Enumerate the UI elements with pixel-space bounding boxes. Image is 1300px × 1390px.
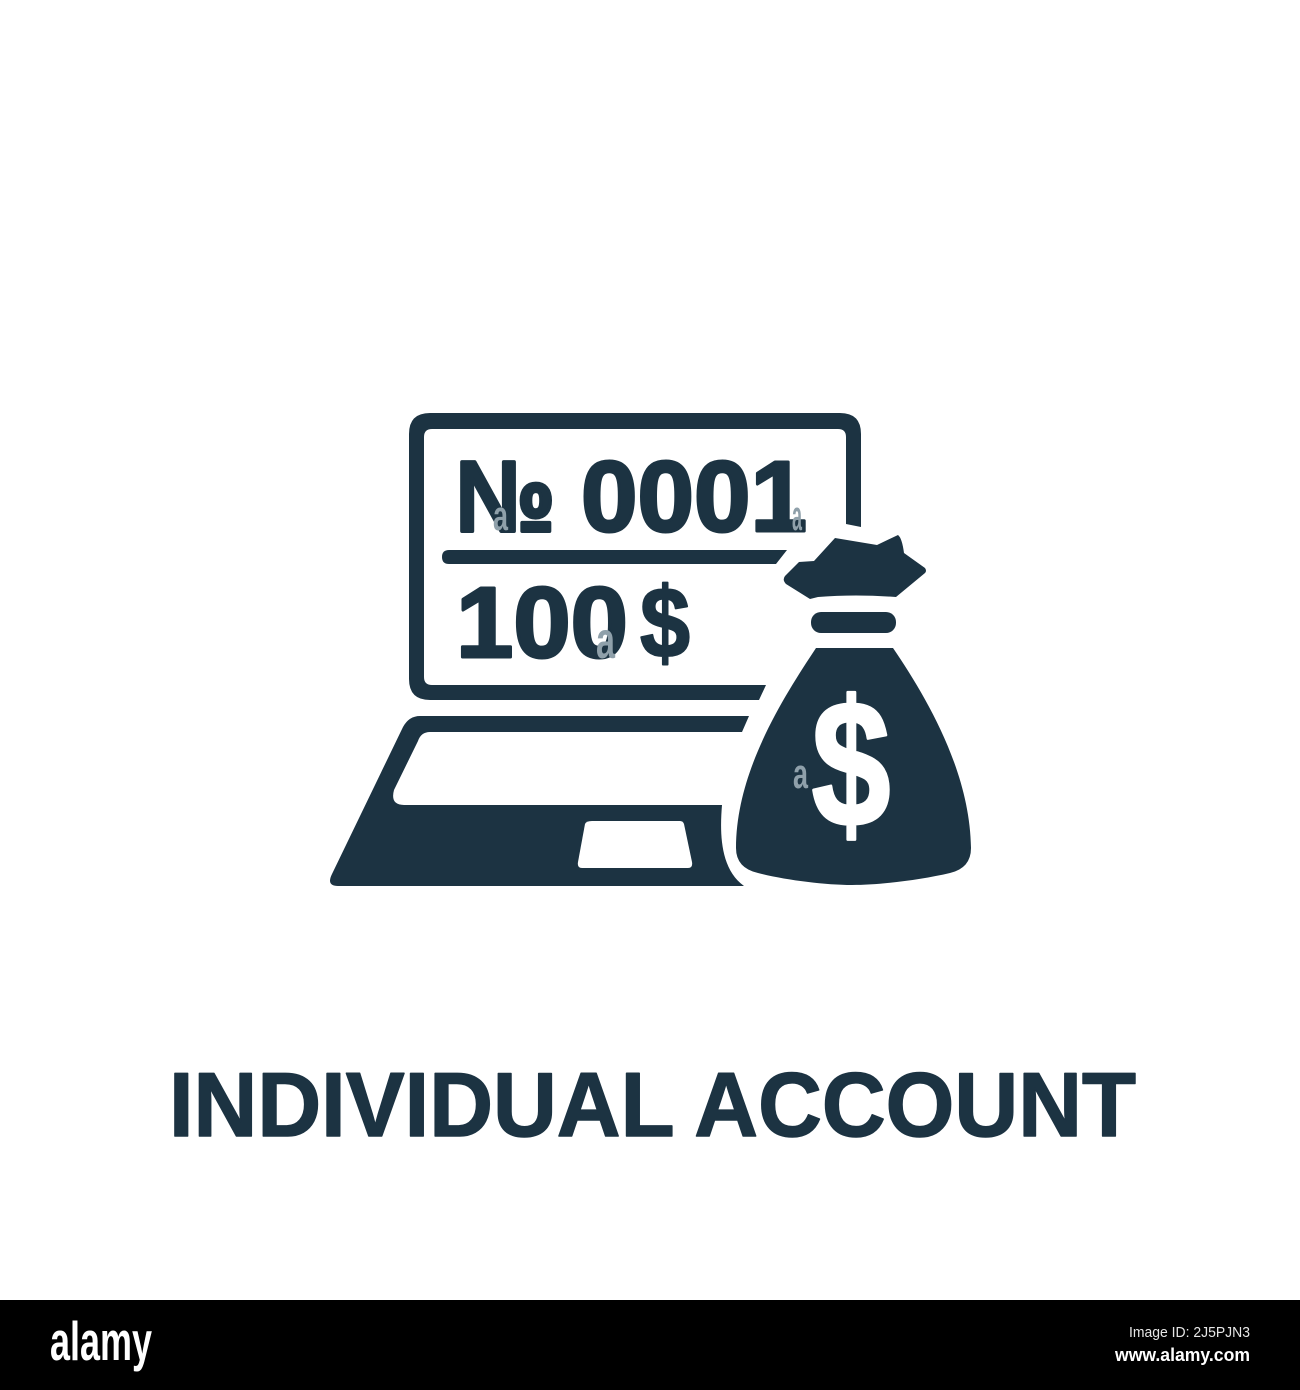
trackpad [578, 821, 692, 868]
stock watermark letters: a [493, 492, 508, 539]
website: www.alamy.com [1114, 1345, 1250, 1365]
amount text: $ [640, 567, 690, 679]
account number text: № [456, 441, 555, 553]
money bag top [784, 535, 926, 599]
money bag body [736, 648, 971, 885]
stock watermark letters: a [793, 750, 808, 797]
image id: Image ID: 2J5PJN3 [1129, 1324, 1250, 1341]
account number text [456, 441, 807, 553]
icon: laptop with account number and money bag [330, 413, 971, 886]
money bag tie [811, 612, 896, 633]
account number text: 0001 [581, 441, 807, 553]
stock watermark letters: a [596, 612, 616, 670]
dollar sign on bag: $ [811, 664, 891, 865]
amount text: 100 [456, 567, 628, 679]
footer bar [0, 1300, 1300, 1390]
laptop base with keyboard cut-out [330, 716, 749, 886]
divider line [442, 550, 787, 564]
laptop screen frame [409, 413, 861, 700]
footer logo: alamy [50, 1310, 152, 1372]
stock watermark letters: a [792, 492, 802, 539]
stock watermark letters [493, 492, 808, 797]
title: INDIVIDUAL ACCOUNT [169, 1055, 1136, 1156]
